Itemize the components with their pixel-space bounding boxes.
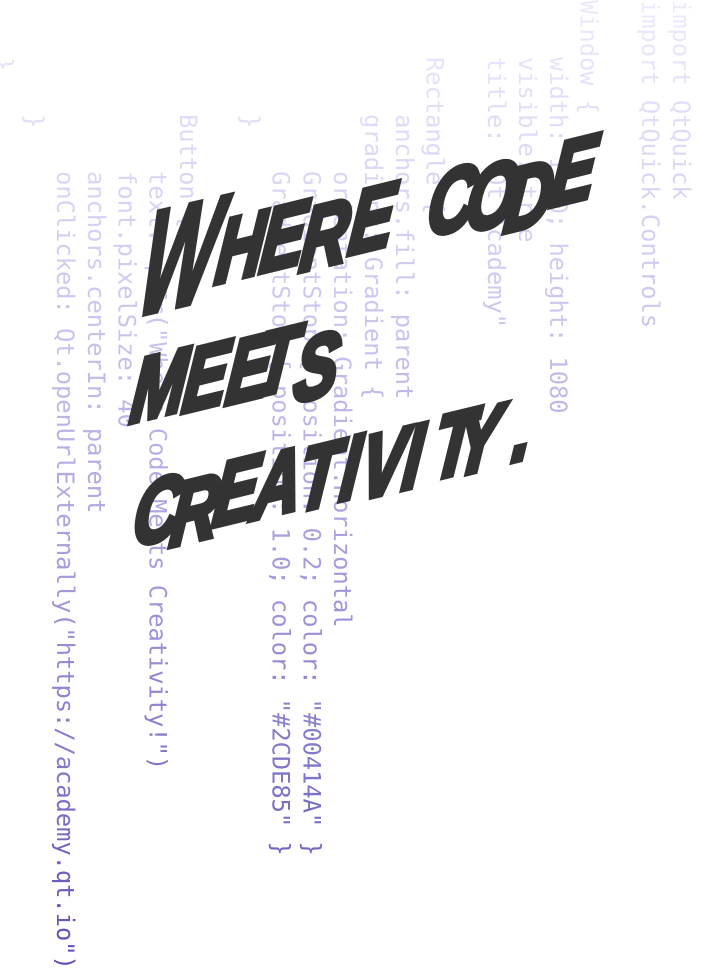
rotated QML code block: title: "Qt Academy" [482,0,510,328]
rotated QML code block: Button { [174,0,202,228]
headline line 1: Where code [119,113,616,348]
rotated QML code block: GradientStop { position: 0.2; color: "#00414A" } [297,0,325,856]
rotated QML code block: anchors.centerIn: parent [82,0,110,513]
rotated QML code block: Window { [575,0,603,114]
rotated QML code block: text: qsTr("Where Code Meets Creativity!") [143,0,171,770]
rotated QML code block: gradient: Gradient { [359,0,387,399]
rotated QML code block: } [236,0,264,128]
headline [114,113,616,566]
rotated QML code block: import QtQuick [667,0,695,200]
headline line 3: creativity.: CREATIVITY. [117,375,550,566]
rotated QML code block: Rectangle { [421,0,449,214]
rotated QML code block: orientation: Gradient.Horizontal [328,0,356,628]
headline line 1: Where code: HERE CODE [199,113,616,303]
rotated QML code block: import QtQuick.Controls [636,0,664,328]
rotated QML code block: } [20,0,48,128]
headline line 1: Where code: W [119,162,248,348]
rotated QML code block: width: 1920; height: 1080 [544,0,572,414]
rotated QML code block: visible: true [513,0,541,242]
rotated QML code block: font.pixelSize: 40 [113,0,141,428]
rotated QML code block: onClicked: Qt.openUrlExternally("https://academy.qt.io") [51,0,79,968]
rotated QML code block: GradientStop { position: 1.0; color: "#2CDE85" } [267,0,295,856]
rotated QML code block: anchors.fill: parent [390,0,418,399]
headline line 2: meets: MEETS [114,303,359,442]
